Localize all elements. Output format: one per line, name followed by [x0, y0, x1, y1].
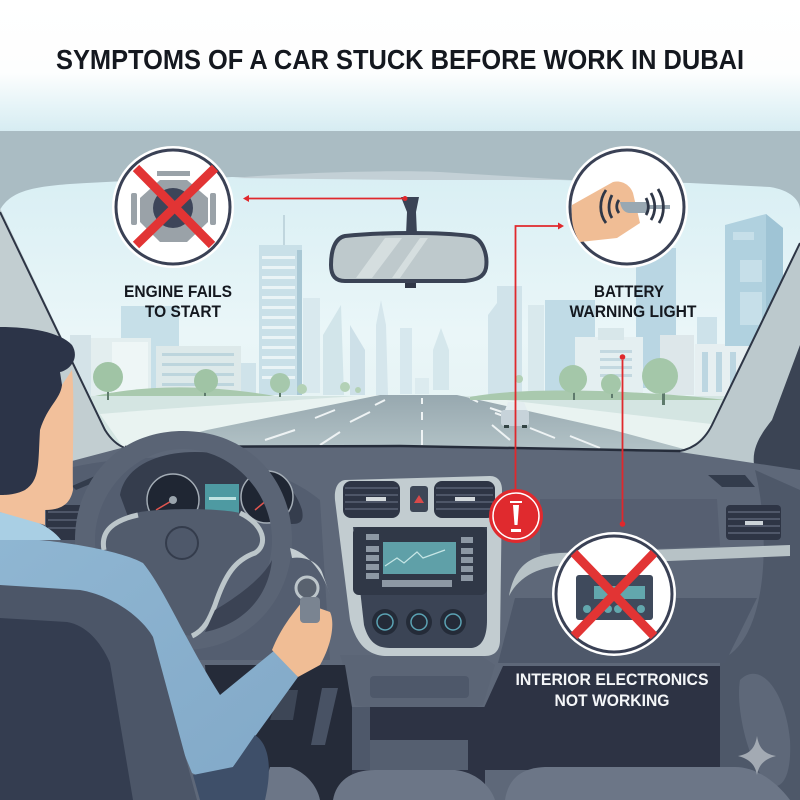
lower centre console — [340, 655, 495, 709]
sky — [0, 177, 800, 460]
shirt — [0, 538, 298, 777]
air vents — [343, 481, 495, 518]
hand — [272, 602, 332, 677]
label: interior electronics: INTERIOR ELECTRONICS — [516, 671, 708, 689]
torso pants — [193, 735, 269, 800]
title: SYMPTOMS OF A CAR STUCK BEFORE WORK IN DUBAI — [56, 44, 744, 75]
neck and face — [0, 370, 73, 525]
dashboard — [0, 446, 800, 800]
icon: sparkle watermark — [738, 736, 776, 775]
label: engine fails — [124, 283, 232, 321]
car roof — [0, 131, 800, 251]
warning badge — [489, 489, 543, 543]
icon: hand turning key — [566, 146, 688, 268]
rear-view mirror — [331, 197, 486, 288]
key fob — [300, 597, 320, 623]
hair — [0, 327, 75, 495]
label: interior electronics — [516, 671, 708, 710]
windshield scene — [0, 171, 800, 460]
driver footwell — [205, 665, 352, 800]
passenger vent — [726, 505, 781, 540]
header background — [0, 0, 800, 132]
skyline left — [70, 215, 449, 405]
centre stack frame — [335, 476, 502, 656]
icon: radio crossed out — [552, 532, 676, 656]
ignition — [290, 548, 330, 599]
leader lines — [246, 198, 622, 524]
collar — [0, 512, 61, 540]
dark right door area — [754, 345, 800, 480]
ground and road — [0, 396, 800, 460]
hazard button — [410, 486, 428, 512]
front seats bottom — [260, 767, 790, 800]
steering wheel — [75, 431, 292, 650]
leader arrowheads — [243, 195, 625, 527]
right A-pillar — [670, 243, 800, 500]
label: engine fails: TO START — [145, 303, 221, 321]
driver — [0, 327, 332, 800]
label: battery warning — [570, 283, 696, 321]
radio panel — [353, 527, 487, 595]
car on road — [501, 402, 529, 428]
instrument binnacle — [120, 452, 303, 526]
seat — [0, 585, 197, 800]
footwell — [483, 666, 720, 770]
glovebox panel — [540, 499, 720, 553]
right door — [720, 470, 800, 800]
label: engine fails: ENGINE FAILS — [124, 283, 232, 301]
label: interior electronics: NOT WORKING — [554, 692, 670, 710]
left A-pillar — [0, 208, 132, 480]
icon: engine crossed out — [112, 146, 234, 268]
skyline right — [488, 214, 783, 397]
trees — [93, 358, 725, 405]
label: battery warning: WARNING LIGHT — [570, 303, 696, 321]
climate knobs — [372, 609, 466, 635]
left vents — [46, 476, 95, 540]
label: battery warning: BATTERY — [594, 283, 664, 301]
